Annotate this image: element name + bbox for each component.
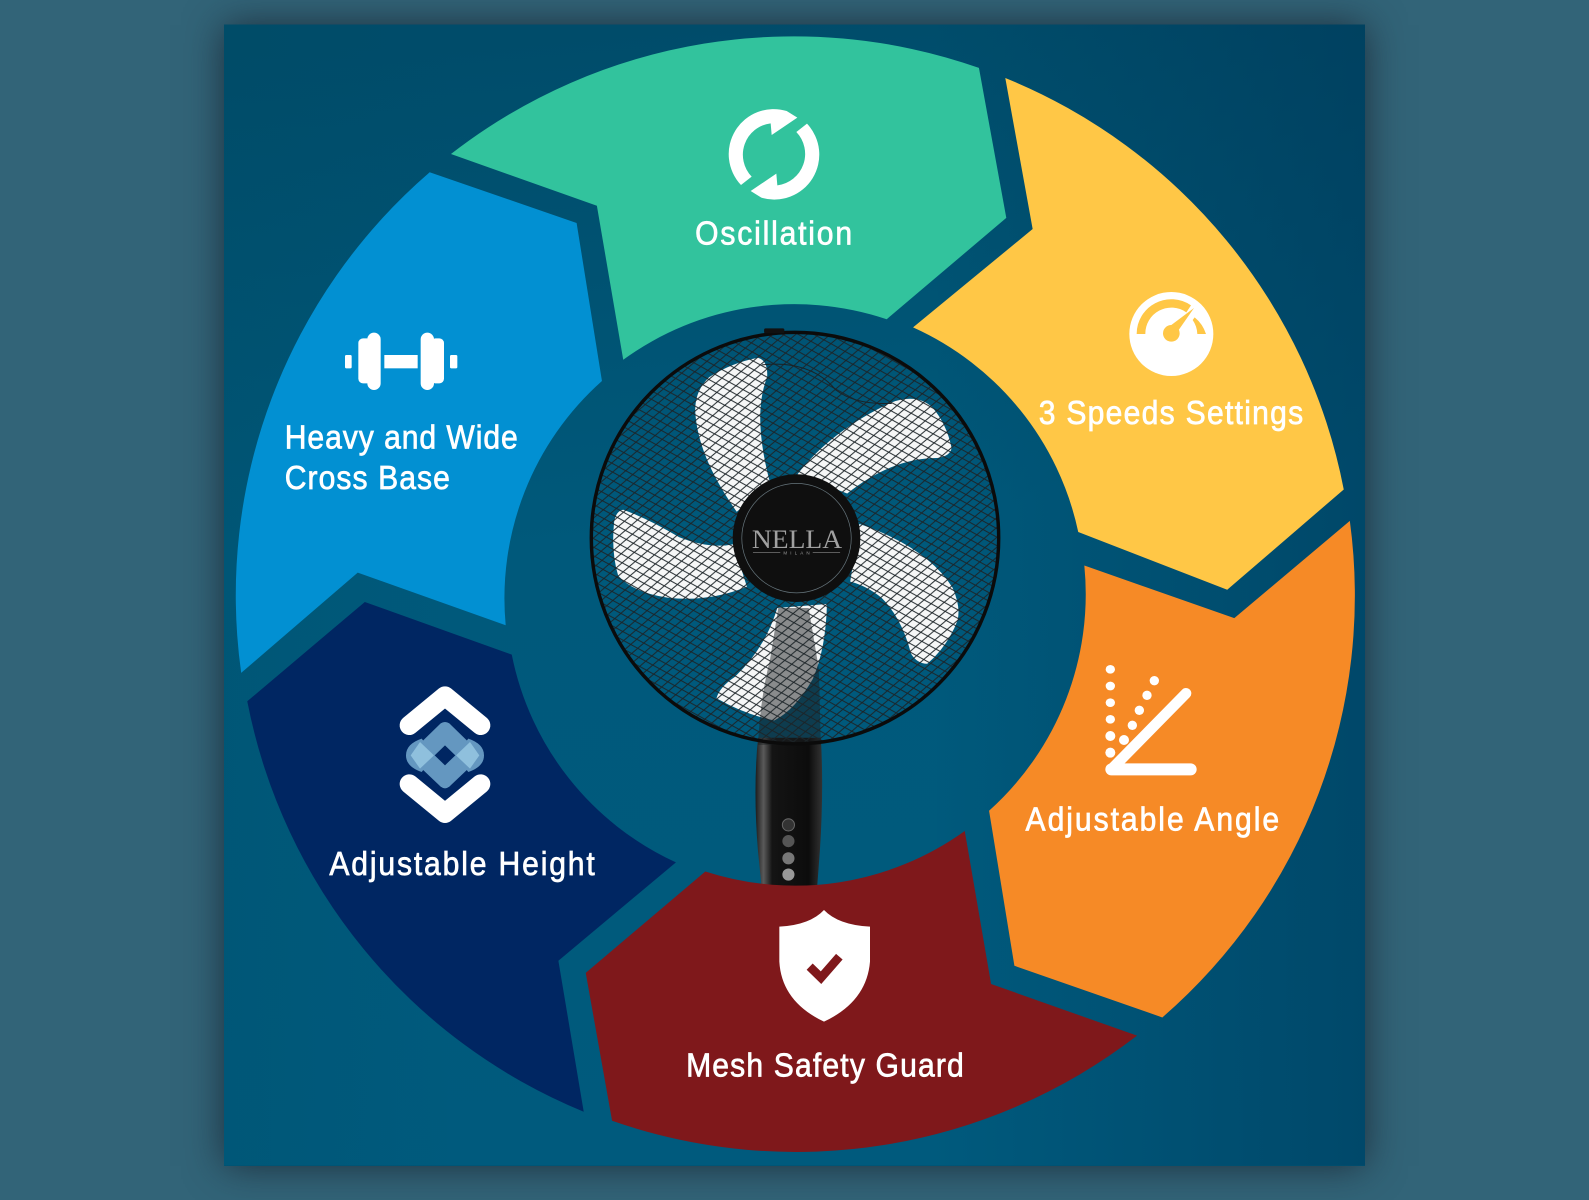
fan blades [613,358,958,721]
segment: adjustable height [247,602,676,1112]
panel shading [224,24,1365,1166]
label: adjustable height: Adjustable Height [329,845,595,882]
background panel [224,24,1365,1166]
guard mesh [588,329,1003,750]
brand subtext: MILAN [783,550,810,555]
brand text: NELLA [752,525,842,554]
guard wire [762,364,892,404]
label: oscillation: Oscillation [695,214,852,252]
support arm seen through guard [758,608,821,745]
segment: heavy base [236,172,602,673]
icon: dumbbell [345,333,457,390]
fan stand [755,738,822,892]
guard rim [591,332,999,744]
segment: speed settings [913,78,1344,590]
hub [733,474,860,602]
label: speeds: 3 Speeds Settings [1039,394,1303,431]
icon: adjustable angle [1105,665,1191,769]
icon: oscillation arrows [729,109,819,200]
icon: adjustable height [406,696,484,813]
guard clip [764,328,784,333]
label: heavy base: Cross Base [285,458,450,496]
fan head [588,328,1003,750]
label: heavy base [285,418,518,496]
feature wheel infographic [224,24,1365,1166]
label: mesh safety guard: Mesh Safety Guard [686,1046,964,1084]
label: heavy base: Heavy and Wide [285,418,518,456]
icon: safety shield [779,910,870,1022]
icon: speed gauge [1129,292,1213,376]
label: adjustable angle: Adjustable Angle [1026,800,1279,838]
segment: oscillation [451,36,1006,360]
segment: adjustable angle [989,521,1355,1017]
segment: mesh safety guard [586,831,1137,1152]
